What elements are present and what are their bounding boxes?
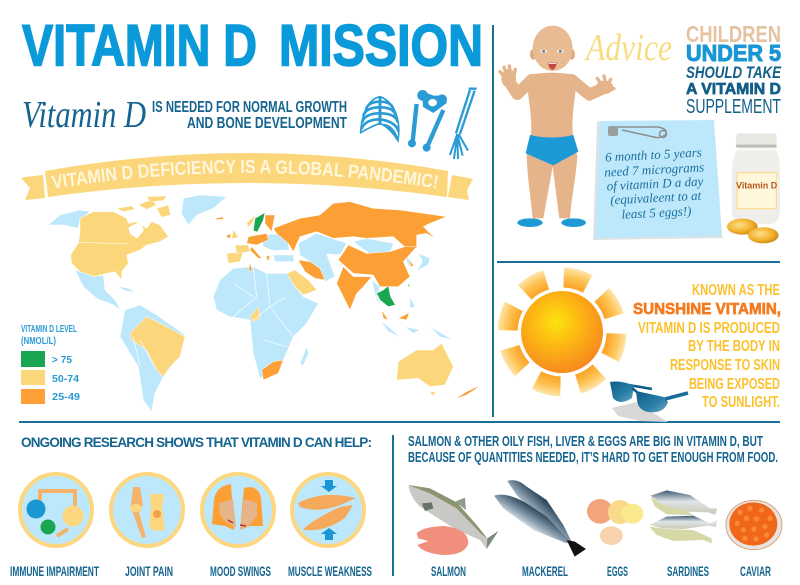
line: a vitamin d: A VITAMIN D — [686, 81, 781, 98]
mackerel pair — [494, 480, 586, 557]
line: under 5: UNDER 5 — [686, 40, 781, 66]
safety pin — [608, 126, 666, 138]
icon: arm and hand bones — [450, 89, 477, 159]
50-74 regions — [71, 196, 453, 396]
banner band — [45, 153, 448, 197]
icon: pelvis and femurs — [408, 90, 447, 151]
label: mood swings: MOOD SWINGS — [210, 563, 271, 579]
children supplement text — [686, 21, 782, 118]
sunshine text — [633, 282, 781, 411]
sardines — [649, 490, 717, 543]
label 25-49: 25-49 — [52, 392, 80, 403]
pinned note — [593, 120, 724, 240]
advice script: Advice — [584, 27, 672, 69]
label: sardines: SARDINES — [667, 563, 709, 579]
bottle label — [737, 173, 776, 209]
swatch: 50-74 — [21, 370, 45, 385]
salmon steak — [417, 526, 468, 555]
note shadow — [593, 121, 724, 240]
banner right tail — [448, 175, 473, 200]
bottle body — [732, 150, 780, 224]
sun disc — [521, 291, 603, 373]
25-49 regions — [216, 202, 479, 399]
note text: (equivaleent to at — [610, 188, 702, 207]
bottle cap — [736, 133, 777, 149]
script word: Vitamin D: Vitamin D — [22, 94, 146, 136]
intro line 1: IS NEEDED FOR NORMAL GROWTH — [152, 99, 347, 116]
sun — [508, 278, 616, 386]
note text: 6 month to 5 years — [605, 145, 702, 165]
label: caviar: CAVIAR — [740, 563, 771, 579]
map legend — [21, 324, 80, 404]
note text: of vitamin D a day — [606, 173, 704, 194]
line 2: SUNSHINE VITAMIN, — [633, 301, 781, 318]
label 50-74: 50-74 — [52, 374, 79, 385]
sunglasses frame and lenses — [610, 382, 688, 412]
intro line 2: AND BONE DEVELOPMENT — [187, 115, 347, 132]
swatch: above 75 — [21, 351, 45, 367]
label: joint pain: JOINT PAIN — [125, 563, 173, 579]
label: immune impairment: IMMUNE IMPAIRMENT — [10, 563, 99, 579]
banner text: VITAMIN D DEFICIENCY IS A GLOBAL PANDEMIC! — [51, 160, 438, 188]
baby diaper — [526, 135, 578, 165]
icon: mood swings — [202, 474, 274, 546]
note text: least 5 eggs!) — [621, 203, 692, 222]
icon: rib cage — [361, 97, 399, 141]
title: MISSION — [279, 14, 483, 78]
note text — [603, 144, 707, 223]
banner — [21, 153, 473, 200]
baby head — [530, 26, 575, 71]
baby torso and legs — [527, 73, 577, 218]
salmon fish — [408, 485, 498, 549]
sun rays — [508, 278, 616, 386]
title: VITAMIN D — [22, 14, 257, 78]
sunglasses shadow — [612, 402, 668, 422]
banner left tail — [21, 175, 45, 200]
>75 regions — [253, 213, 410, 307]
swatch: 25-49 — [21, 389, 45, 404]
note paper — [595, 120, 722, 238]
icon: immune impairment — [20, 474, 92, 546]
panel: vitamin D foods — [408, 434, 782, 579]
label above 75: > 75 — [52, 355, 72, 366]
title — [22, 14, 483, 78]
label text: Vitamin D — [736, 181, 778, 191]
label: mackerel: MACKEREL — [522, 563, 568, 579]
internal borders — [78, 242, 293, 370]
intro text block — [22, 94, 347, 136]
label: muscle weakness: MUSCLE WEAKNESS — [288, 563, 372, 579]
research heading: ONGOING RESEARCH SHOWS THAT VITAMIN D CAN HELP: — [21, 435, 372, 450]
label: eggs: EGGS — [607, 563, 628, 579]
baby feet — [517, 218, 543, 227]
world map — [48, 195, 479, 412]
capsules — [727, 219, 758, 235]
baby illustration — [500, 26, 614, 227]
sunglasses — [610, 382, 688, 422]
supplement bottle — [727, 133, 780, 243]
icon: muscle weakness — [292, 474, 364, 546]
icon: joint pain — [111, 474, 183, 546]
panel: research benefits — [10, 435, 372, 579]
legend title: VITAMIN D LEVEL — [21, 324, 77, 335]
note text: need 7 micrograms — [604, 159, 704, 180]
Hudson Bay — [128, 222, 144, 239]
bone icons — [361, 89, 477, 159]
label: salmon: SALMON — [431, 563, 466, 579]
legend unit: (NMOL/L) — [21, 336, 56, 347]
food illustrations — [408, 480, 782, 557]
eggs — [587, 499, 643, 545]
caviar bowl — [726, 500, 782, 550]
light blue regions — [48, 195, 453, 412]
baby arms and hands — [500, 66, 614, 95]
